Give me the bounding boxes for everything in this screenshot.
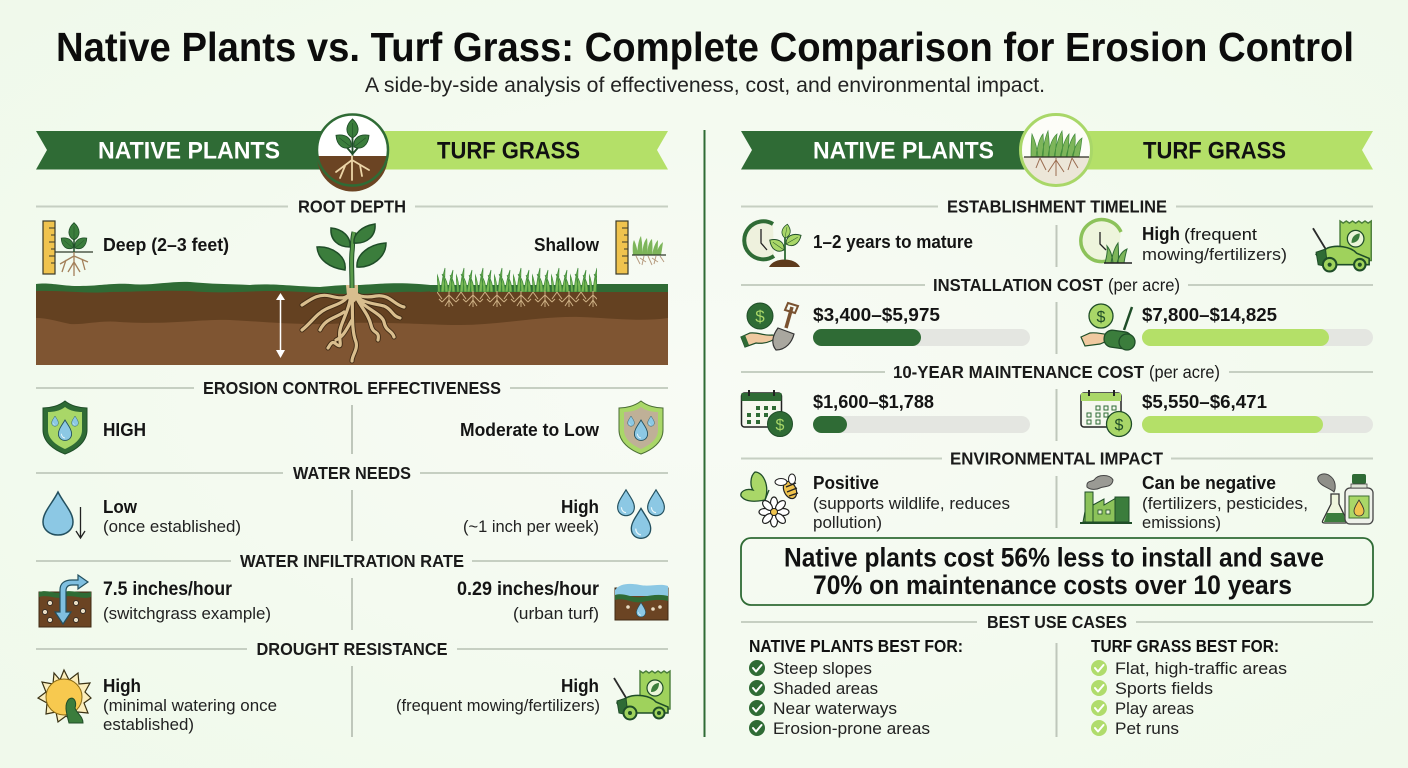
icon: green shield (43, 401, 87, 454)
text: moderate to low: Moderate to Low (460, 419, 600, 440)
list: turf grass best for (1091, 636, 1287, 738)
soil cross-section chart (36, 224, 668, 365)
icon: sun with wilting leaf (38, 670, 91, 723)
list: turf grass best for: Play areas (1115, 700, 1194, 718)
callout: cost savings: 70% on maintenance costs over 10 years (813, 570, 1292, 600)
heading: best use cases: BEST USE CASES (987, 612, 1127, 632)
text: positive impact: (supports wildlife, reduces (813, 495, 1010, 513)
text: high water needs: High (561, 496, 599, 517)
text: turf timeline: mowing/fertilizers) (1142, 246, 1287, 264)
icon: calendar with dollar: $ (776, 417, 785, 434)
icon: butterfly, bee, daisy (741, 472, 799, 527)
heading: erosion control effectiveness: EROSION CONTROL EFFECTIVENESS (203, 378, 501, 398)
text: turf infiltration (457, 579, 600, 623)
title: Native Plants vs. Turf Grass: Complete Comparison for Erosion Control (56, 24, 1354, 70)
text: native infiltration (103, 579, 271, 623)
text: native infiltration: 7.5 inches/hour (103, 579, 233, 600)
icon: hand with dollar and shovel: $ (755, 307, 765, 326)
bar: turf install cost (1142, 329, 1373, 346)
text: native timeline: 1–2 years to mature (813, 231, 973, 252)
icon: hand with dollar and sod roll (1081, 304, 1135, 350)
icon: flask and chemical bottle (1318, 474, 1373, 524)
icon: tan shield (619, 401, 663, 454)
native plants ribbon (741, 131, 1030, 170)
list: native plants best for (749, 636, 963, 738)
subtitle: A side-by-side analysis of effectiveness, cost, and environmental impact. (365, 73, 1045, 97)
icon: light calendar with dollar (1081, 390, 1132, 436)
grass surface band (36, 282, 668, 294)
text: native drought resistance: established) (103, 716, 194, 734)
heading: installation cost: INSTALLATION COST(per acre) (933, 275, 1180, 295)
icon: factory (1080, 476, 1132, 523)
icon: mower and fertilizer (614, 671, 670, 720)
icon: light calendar with dollar: $ (1115, 417, 1124, 434)
text: negative impact: emissions) (1142, 514, 1221, 532)
list: turf grass best for: Pet runs (1115, 720, 1179, 738)
icon: soil with pooled water (615, 584, 668, 620)
turf grass label: TURF GRASS (1143, 138, 1286, 164)
icon: soil with fast infiltration arrow (39, 575, 91, 627)
text: turf drought resistance (396, 675, 600, 715)
left banner (36, 131, 668, 170)
icon: clock with seedling (744, 221, 804, 267)
heading: water infiltration rate: WATER INFILTRATION RATE (240, 551, 464, 571)
list: native plants best for: Near waterways (773, 700, 897, 718)
right banner (741, 131, 1373, 170)
panel: costs and use cases (right) (741, 114, 1373, 738)
arrow: root depth range (276, 293, 285, 358)
icon: grass medallion (1020, 114, 1092, 187)
icon: calendar with dollar (742, 390, 792, 436)
heading: drought resistance: DROUGHT RESISTANCE (256, 639, 448, 659)
text: turf maintenance cost: $5,550–$6,471 (1142, 391, 1267, 412)
turf grass with shallow roots (437, 266, 597, 309)
turf grass ribbon (1080, 131, 1373, 170)
text: positive impact: pollution) (813, 514, 882, 532)
callout: cost savings: Native plants cost 56% less to install and save (784, 542, 1324, 572)
heading: root depth: ROOT DEPTH (298, 196, 406, 216)
text: turf infiltration: 0.29 inches/hour (457, 579, 600, 600)
list: turf grass best for: Sports fields (1115, 680, 1213, 698)
heading: establishment timeline: ESTABLISHMENT TIMELINE (947, 196, 1167, 216)
turf grass ribbon (375, 131, 668, 170)
native plants label: NATIVE PLANTS (813, 138, 994, 164)
text: native drought resistance (103, 675, 277, 734)
icon: clock with grass (1081, 220, 1132, 263)
text: high water needs: (~1 inch per week) (463, 518, 599, 536)
icon: ruler with shallow roots (616, 221, 666, 274)
text: native infiltration: (switchgrass example) (103, 605, 271, 623)
text: turf drought resistance: High (561, 675, 599, 696)
list: native plants best for: Erosion-prone areas (773, 720, 930, 738)
list: native plants best for: Shaded areas (773, 680, 878, 698)
text: turf install cost: $7,800–$14,825 (1142, 304, 1277, 325)
icon: hand with dollar and sod roll: $ (1097, 309, 1106, 326)
text: low water needs: Low (103, 496, 138, 517)
native plants ribbon (36, 131, 330, 170)
icon: mower and fertilizer (1313, 221, 1371, 271)
deep plant with roots (302, 224, 404, 361)
text: negative impact (1142, 472, 1308, 532)
text: native drought resistance: (minimal watering once (103, 697, 277, 715)
text: negative impact: Can be negative (1142, 472, 1276, 493)
text: native install cost: $3,400–$5,975 (813, 304, 940, 325)
text: low water needs (103, 496, 241, 536)
native plants label: NATIVE PLANTS (98, 138, 280, 164)
text: turf drought resistance: (frequent mowing/fertilizers) (396, 697, 600, 715)
heading: maintenance cost: 10-YEAR MAINTENANCE COST(per acre) (893, 362, 1220, 382)
panel: physical characteristics (left) (36, 114, 670, 737)
text: deep: Deep (2–3 feet) (103, 234, 229, 255)
callout: cost savings (741, 538, 1373, 605)
icon: ruler with deep roots (43, 221, 93, 276)
list: turf grass best for: Flat, high-traffic areas (1115, 660, 1287, 678)
text: turf timeline (1142, 223, 1287, 264)
list: turf grass best for: TURF GRASS BEST FOR: (1091, 636, 1279, 656)
text: high water needs (463, 496, 599, 536)
bar: native maintenance cost (813, 416, 1030, 433)
heading: water needs: WATER NEEDS (293, 463, 411, 483)
heading: environmental impact: ENVIRONMENTAL IMPACT (950, 448, 1163, 468)
text: positive impact (813, 472, 1010, 532)
text: low water needs: (once established) (103, 518, 241, 536)
soil upper layer (36, 290, 668, 325)
text: turf infiltration: (urban turf) (513, 605, 599, 623)
icon: three drops (618, 490, 664, 538)
icon: seedling medallion (317, 114, 388, 192)
list: native plants best for: NATIVE PLANTS BEST FOR: (749, 636, 963, 656)
center divider between columns (704, 130, 706, 737)
list: native plants best for: Steep slopes (773, 660, 872, 678)
turf grass label: TURF GRASS (437, 138, 580, 164)
text: shallow: Shallow (534, 234, 600, 255)
text: negative impact: (fertilizers, pesticides, (1142, 495, 1308, 513)
bar: native install cost (813, 329, 1030, 346)
text: high effectiveness: HIGH (103, 419, 146, 440)
text: native drought resistance: High (103, 675, 141, 696)
soil lower layer (36, 300, 668, 365)
text: positive impact: Positive (813, 472, 879, 493)
icon: drop with down arrow (43, 492, 85, 538)
text: turf timeline: High(frequent (1142, 223, 1257, 244)
text: native maintenance cost: $1,600–$1,788 (813, 391, 934, 412)
bar: turf maintenance cost (1142, 416, 1373, 433)
icon: hand with dollar and shovel (741, 303, 798, 350)
